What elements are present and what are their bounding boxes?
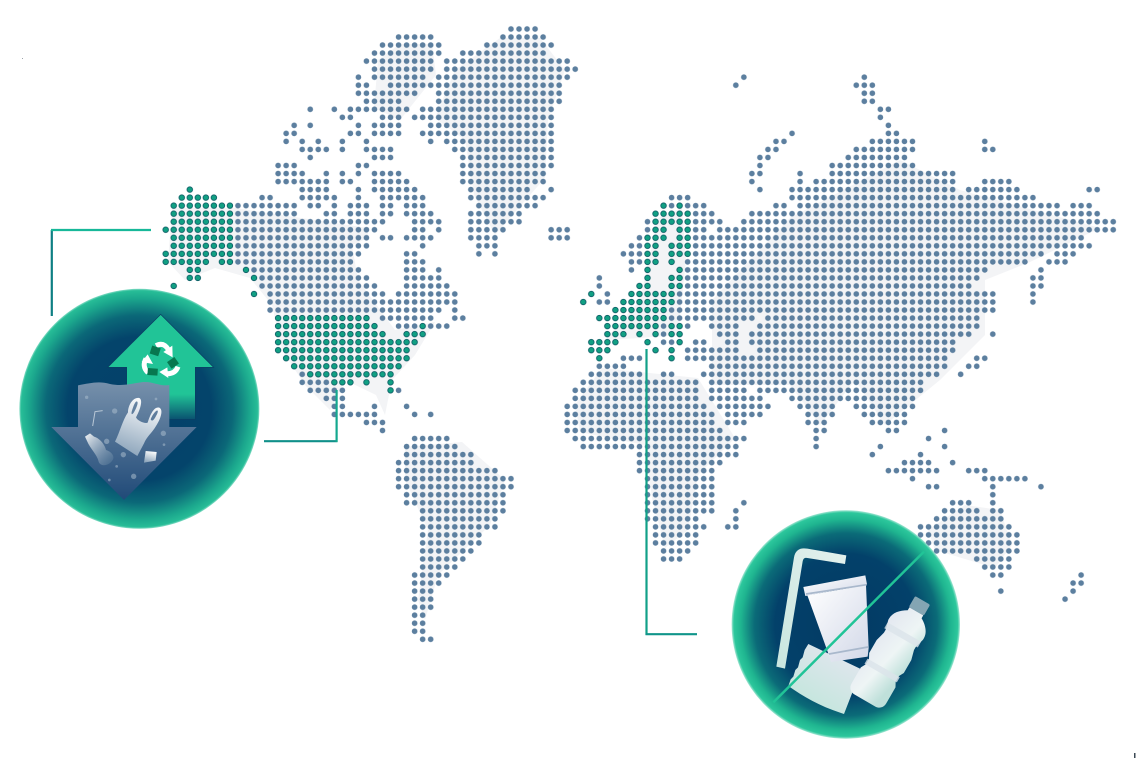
icon: down arrow with water surface [51,382,197,500]
leader line: Europe to single-use plastics icon [646,349,697,635]
icon: recycling symbol [142,344,179,378]
bubbles [85,396,166,481]
continent shading under dots [168,38,1100,620]
icon: plastic bottle [85,433,113,465]
icon: banned single-use plastics circle [732,510,960,739]
icon: plastic cup [144,451,157,463]
leader line: United States to recycling icon [264,390,338,442]
icon: plastic water bottle [848,590,940,711]
icon: wrapper [788,644,860,714]
dot map: land dots in blue [238,29,1113,639]
leader line: Alaska to recycling icon [51,230,151,316]
icon: diagonal ban line [773,552,924,702]
icon: up arrow [108,314,214,419]
icon: plastic bag [115,398,161,456]
icon: plastic straw [93,411,103,426]
icon: bent straw [776,548,846,669]
icon: paper cup [803,575,869,662]
dot map: highlighted regions in green (Alaska, contiguous US, Europe) [166,190,688,390]
icon: recycling versus ocean plastic circle [19,289,259,529]
